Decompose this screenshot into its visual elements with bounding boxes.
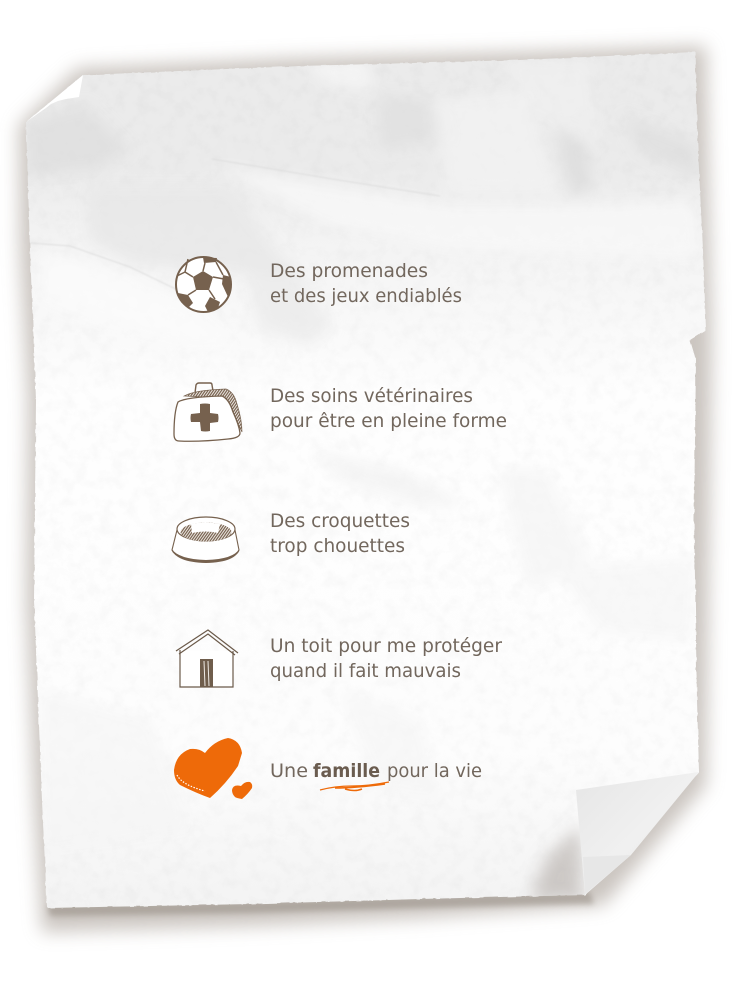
- text: vet care: Des soins vétérinaires: [270, 386, 473, 407]
- text: kibble: Des croquettes: [270, 511, 410, 532]
- crease facets: [26, 60, 700, 850]
- row 3: bowl: [172, 511, 410, 563]
- text: family: [270, 761, 482, 782]
- icon: football: [176, 257, 231, 312]
- text: roof: quand il fait mauvais: [270, 661, 461, 682]
- text: family: famille: [313, 761, 380, 782]
- text: walks and games: Des promenades: [270, 261, 428, 282]
- text: walks and games: [270, 261, 462, 307]
- icon: orange hearts: [174, 738, 252, 799]
- text: walks and games: et des jeux endiablés: [270, 286, 462, 307]
- row 5: hearts: [174, 738, 482, 799]
- row 4: house: [176, 630, 502, 687]
- underline scribble: [320, 782, 389, 790]
- crease lines: [32, 176, 439, 290]
- text: kibble: [270, 511, 410, 557]
- text: roof: Un toit pour me protéger: [270, 636, 502, 657]
- text: family: Une: [270, 761, 308, 782]
- folded corner: top left: [26, 75, 83, 122]
- row 1: football: [176, 257, 462, 312]
- text: vet care: pour être en pleine forme: [270, 411, 507, 432]
- icon: dog bowl: [172, 517, 239, 563]
- shaded fold by curl: [530, 825, 582, 900]
- icon: dog house: [176, 630, 238, 687]
- folded corner: bottom right: [576, 772, 699, 895]
- text: family: pour la vie: [387, 761, 482, 782]
- icon: medical bag: [174, 383, 242, 441]
- text: kibble: trop chouettes: [270, 536, 405, 557]
- row 2: vet bag: [174, 383, 507, 441]
- text: vet care: [270, 386, 507, 432]
- text: roof: [270, 636, 502, 682]
